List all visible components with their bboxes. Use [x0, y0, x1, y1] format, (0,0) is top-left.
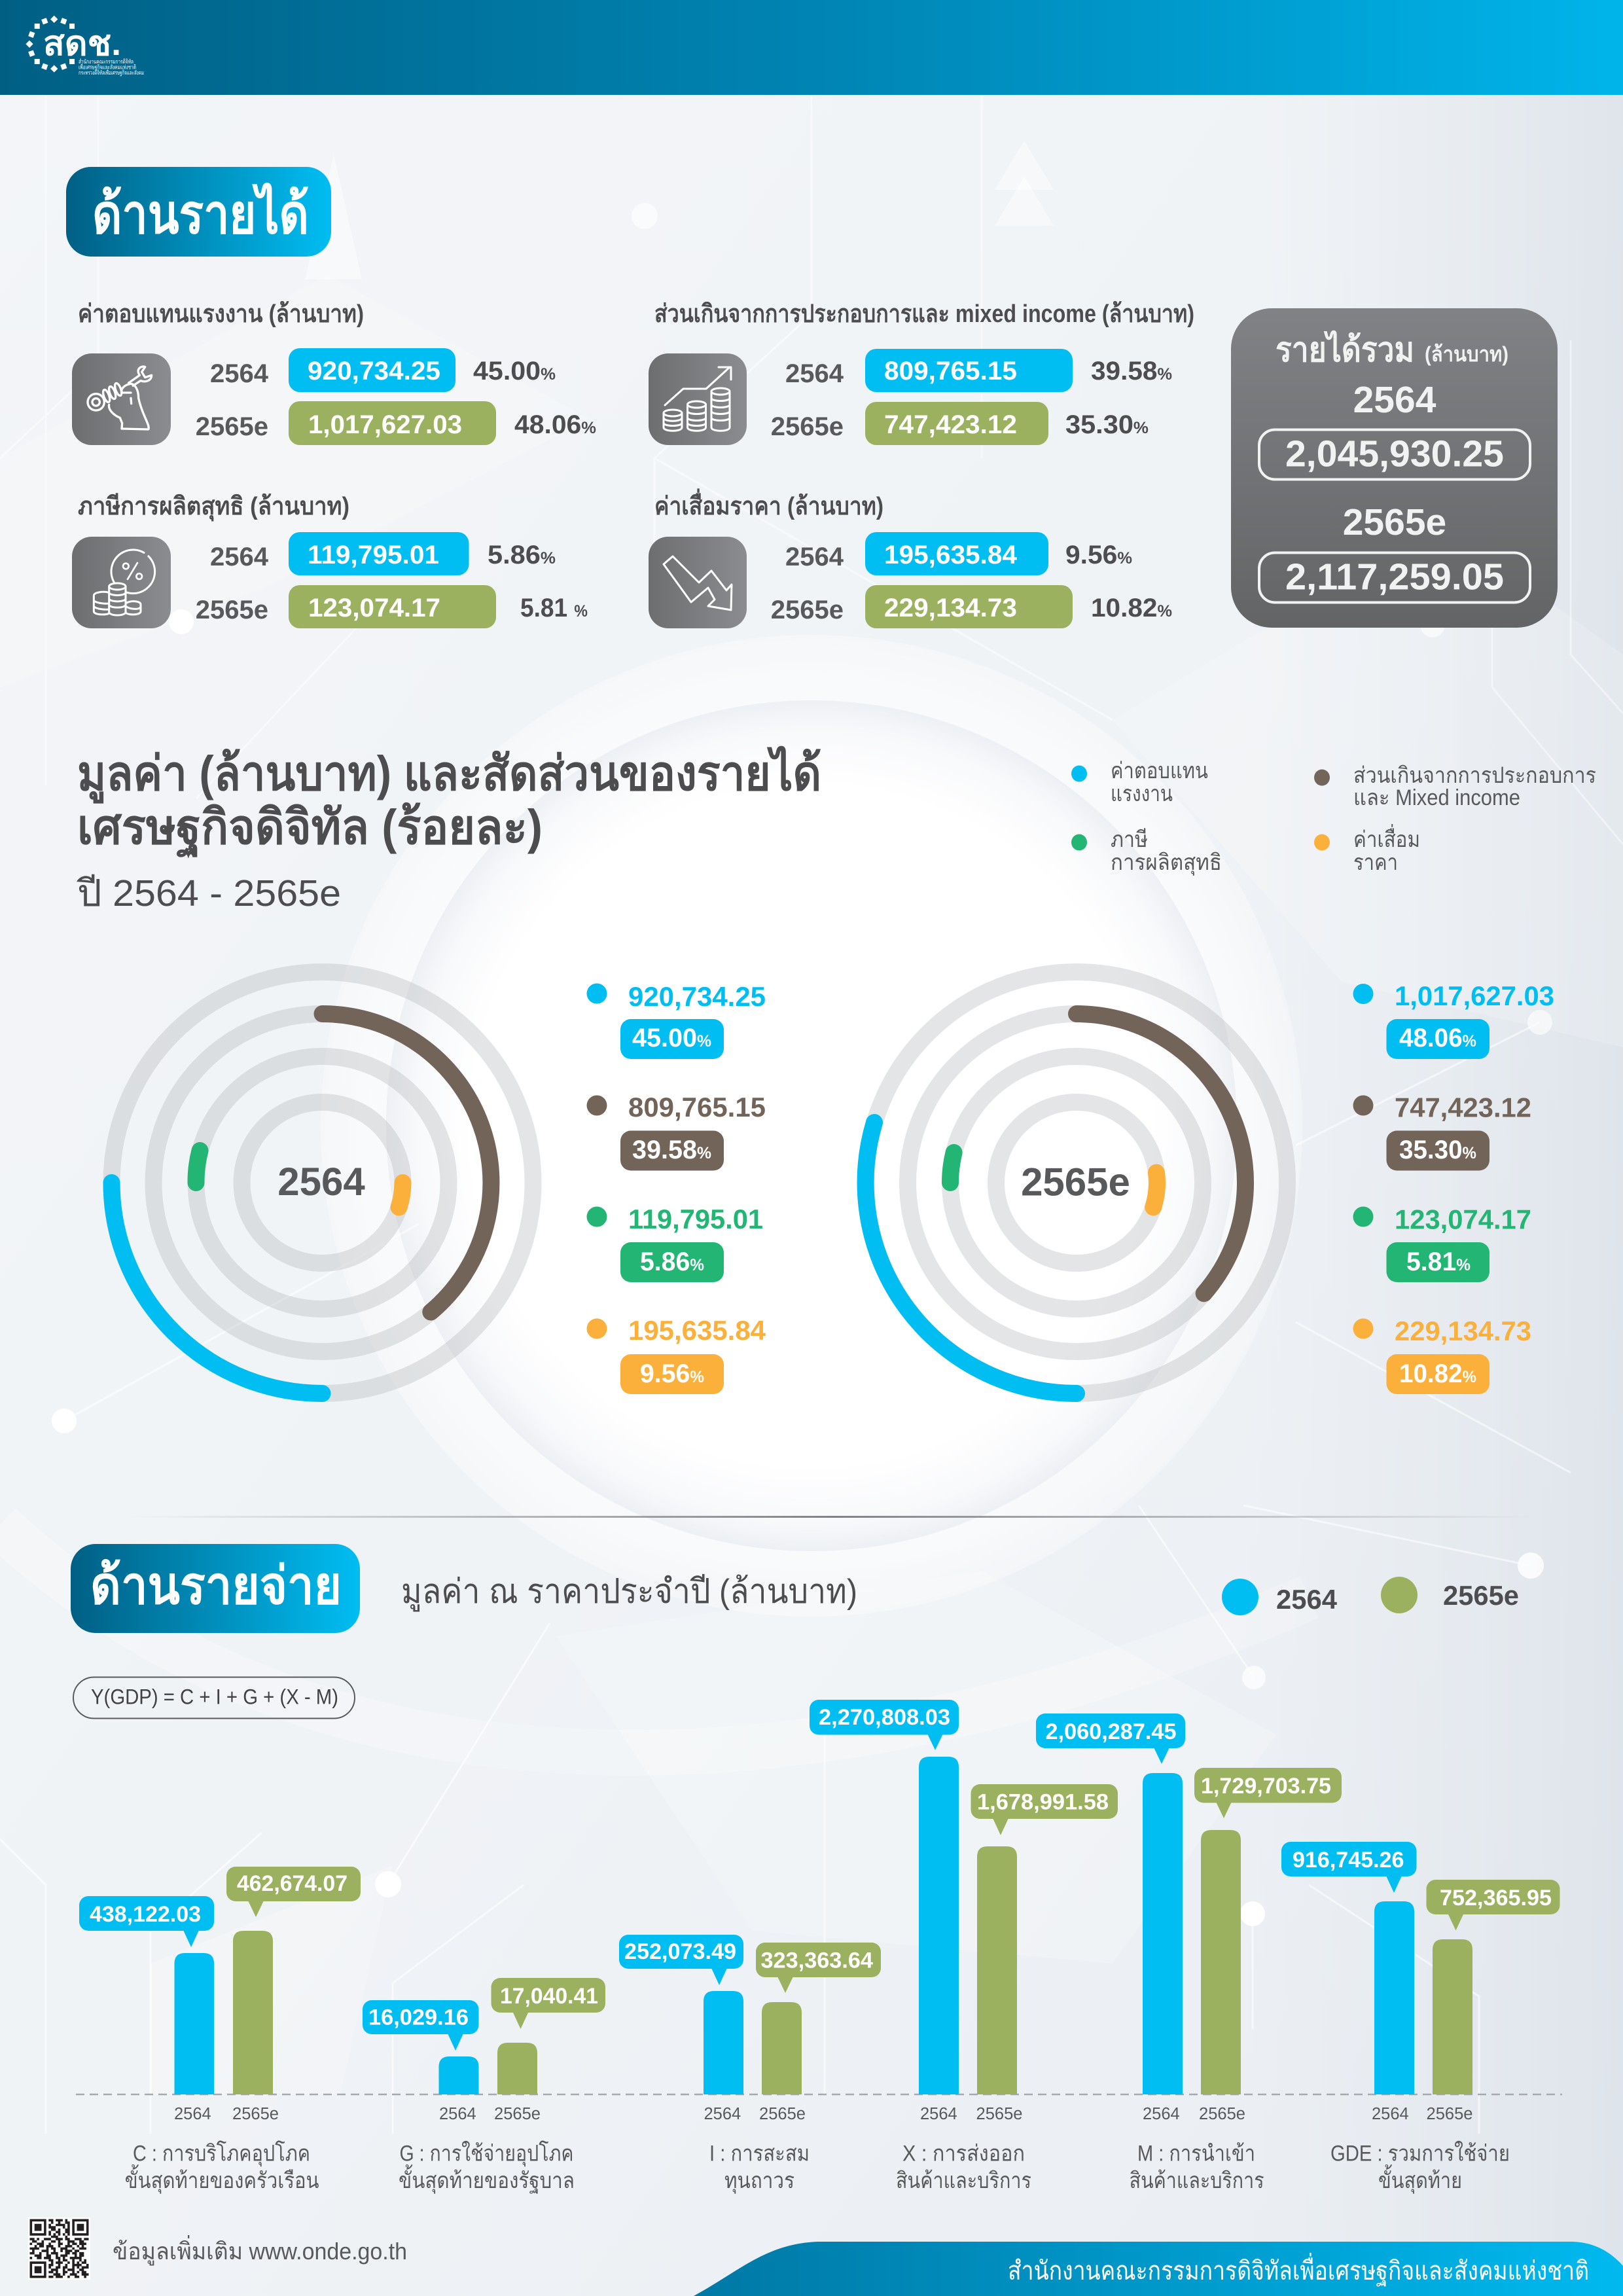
- top header band: [0, 0, 1623, 95]
- row 2564: [785, 532, 1132, 575]
- group: I: 2565e: [759, 2105, 806, 2123]
- QR code: [28, 2217, 90, 2280]
- heading: ค่าตอบแทนแรงงาน (ล้านบาท): [78, 300, 364, 328]
- row 2564: 809,765.15: [884, 357, 1017, 386]
- row 2565e: [196, 585, 588, 628]
- legend: income categories: แรงงาน: [1111, 781, 1173, 806]
- group: GDE: 2565e: [1427, 2105, 1472, 2123]
- row 2565e: 123,074.17: [308, 594, 440, 622]
- value: compensation: 48.06%: [1399, 1024, 1476, 1052]
- row 2565e: 10.82%: [1091, 594, 1172, 622]
- total 2565e: [1259, 501, 1530, 602]
- row 2564: 5.86%: [488, 541, 556, 569]
- panel: total income: [1231, 308, 1558, 628]
- row 2564: 920,734.25: [308, 357, 440, 386]
- legend: income categories: ค่าตอบแทน: [1111, 759, 1208, 783]
- group: C: 2564: [174, 2105, 211, 2123]
- logo: ONDE: กระทรวงดิจิทัลเพื่อเศรษฐกิจและสังคม: [79, 68, 144, 77]
- row 2565e: 1,017,627.03: [308, 410, 462, 439]
- heading pill: expenditure side: ด้านรายจ่าย: [90, 1556, 342, 1615]
- formula pill: [73, 1677, 355, 1719]
- row 2565e: 2565e: [771, 596, 844, 624]
- group: GDE: 916,745.26: [1293, 1848, 1404, 1873]
- row 2564: 2564: [210, 543, 269, 571]
- group: X: 2564: [920, 2105, 957, 2123]
- row 2565e: 48.06%: [514, 410, 596, 439]
- group: C: 2565e: [232, 2105, 279, 2123]
- value: tax: [1353, 1204, 1531, 1282]
- group: C: C : การบริโภคอุปโภค: [133, 2140, 310, 2166]
- group: I: 252,073.49: [624, 1939, 736, 1964]
- group: G: [363, 1978, 605, 2194]
- panel: depreciation: [649, 488, 1172, 628]
- group: G: ขั้นสุดท้ายของรัฐบาล: [399, 2164, 575, 2194]
- group: GDE: 752,365.95: [1440, 1886, 1552, 1910]
- panel: compensation of employees: [72, 300, 596, 445]
- value: tax: 5.81%: [1406, 1247, 1471, 1276]
- chart: radial 2564: 2564: [277, 1160, 365, 1204]
- bar chart: expenditure: [79, 1700, 1560, 2194]
- group: X: [810, 1700, 1118, 2193]
- value: surplus: 39.58%: [632, 1136, 711, 1164]
- icon: falling arrow: [649, 537, 747, 628]
- group: I: 2564: [704, 2105, 741, 2123]
- value: surplus: 35.30%: [1399, 1136, 1476, 1164]
- heading: ภาษีการผลิตสุทธิ (ล้านบาท): [78, 493, 349, 522]
- row 2564: [210, 348, 556, 392]
- logo: ONDE: [26, 16, 144, 77]
- heading: ค่าเสื่อมราคา (ล้านบาท): [654, 488, 883, 520]
- group: GDE: GDE : รวมการใช้จ่าย: [1330, 2140, 1510, 2166]
- icon: growth chart with coins: [649, 353, 747, 445]
- value: compensation: 45.00%: [632, 1024, 711, 1052]
- total heading: รายได้รวม: [1275, 330, 1414, 369]
- chart: radial 2565e: 2565e: [1021, 1160, 1130, 1204]
- value: depreciation: 229,134.73: [1395, 1316, 1531, 1346]
- group: C: [79, 1867, 361, 2194]
- subtitle: มูลค่า ณ ราคาประจำปี (ล้านบาท): [401, 1573, 857, 1612]
- legend: income categories: ส่วนเกินจากการประกอบการ: [1353, 763, 1596, 788]
- panel: operating surplus and mixed income: [649, 300, 1194, 445]
- heading pill: income side: ด้านรายได้: [92, 183, 309, 245]
- row 2564: 2564: [210, 359, 269, 388]
- group: M: [1036, 1713, 1342, 2193]
- group: M: 2564: [1143, 2105, 1180, 2123]
- value: tax: 123,074.17: [1395, 1204, 1531, 1234]
- value: compensation: [586, 981, 766, 1059]
- value: tax: [586, 1204, 763, 1282]
- more info text: ข้อมูลเพิ่มเติม www.onde.go.th: [113, 2235, 407, 2266]
- group: X: X : การส่งออก: [902, 2142, 1025, 2166]
- footer band: [694, 2242, 1623, 2296]
- group: G: G : การใช้จ่ายอุปโภค: [399, 2140, 573, 2166]
- value: depreciation: [586, 1315, 766, 1394]
- group: M: 1,729,703.75: [1201, 1774, 1331, 1799]
- row 2564: 195,635.84: [884, 541, 1018, 569]
- group: G: 2565e: [494, 2105, 541, 2123]
- row 2565e: 2565e: [771, 412, 844, 441]
- row 2565e: [196, 401, 596, 445]
- group: X: 2565e: [976, 2105, 1022, 2123]
- group: GDE: ขั้นสุดท้าย: [1378, 2164, 1462, 2194]
- value: compensation: 1,017,627.03: [1395, 980, 1554, 1011]
- group: X: สินค้าและบริการ: [896, 2168, 1031, 2193]
- group: X: 2,270,808.03: [819, 1705, 950, 1730]
- legend: income categories: ค่าเสื่อม: [1353, 824, 1420, 852]
- chart values 2565e: [1353, 980, 1554, 1394]
- total 2564: 2,045,930.25: [1285, 433, 1504, 475]
- row 2564: 119,795.01: [308, 541, 439, 569]
- row 2564: 2564: [785, 359, 844, 388]
- row 2565e: 35.30%: [1065, 410, 1149, 439]
- group: I: ทุนถาวร: [724, 2168, 794, 2194]
- icon: hand with wrench: [72, 353, 171, 445]
- total 2565e: 2565e: [1343, 501, 1446, 543]
- group: G: 2564: [439, 2105, 476, 2123]
- formula pill: Y(GDP) = C + I + G + (X - M): [91, 1685, 338, 1708]
- group: G: 17,040.41: [500, 1984, 598, 2009]
- legend: years: 2565e: [1443, 1580, 1519, 1611]
- chart section heading: [77, 745, 821, 914]
- chart: radial 2565e: [866, 972, 1287, 1393]
- total 2565e: 2,117,259.05: [1285, 556, 1504, 598]
- row 2564: 45.00%: [473, 357, 556, 386]
- chart section heading: มูลค่า (ล้านบาท) และสัดส่วนของรายได้: [77, 745, 821, 804]
- total 2564: 2564: [1353, 379, 1436, 421]
- group: I: [619, 1935, 881, 2194]
- row 2565e: [771, 585, 1172, 628]
- row 2565e: 747,423.12: [884, 410, 1017, 439]
- value: surplus: 809,765.15: [628, 1092, 766, 1122]
- legend: years: [1222, 1577, 1519, 1615]
- heading pill: expenditure side: [71, 1544, 360, 1633]
- divider: [131, 1516, 1538, 1518]
- total 2564: [1259, 379, 1530, 479]
- value: depreciation: 10.82%: [1399, 1359, 1476, 1388]
- chart values 2564: [586, 981, 766, 1394]
- heading pill: income side: [66, 167, 331, 257]
- logo: ONDE: สำนักงานคณะกรรมการดิจิทัล: [79, 58, 134, 65]
- group: C: 462,674.07: [237, 1871, 348, 1896]
- total unit: (ล้านบาท): [1425, 342, 1508, 366]
- row 2564: 39.58%: [1091, 357, 1172, 386]
- row 2564: [785, 349, 1172, 392]
- value: depreciation: 9.56%: [640, 1359, 704, 1388]
- row 2565e: 5.81 %: [520, 594, 588, 622]
- value: surplus: [1353, 1092, 1531, 1170]
- logo: ONDE: สดช.: [43, 25, 121, 63]
- chart section heading: เศรษฐกิจดิจิทัล (ร้อยละ): [77, 800, 543, 859]
- value: depreciation: [1353, 1316, 1531, 1394]
- group: G: 16,029.16: [368, 2005, 469, 2030]
- panel: tax on production: [72, 493, 588, 628]
- value: tax: 5.86%: [640, 1247, 704, 1276]
- axis baseline: [76, 2094, 1562, 2095]
- row 2564: [210, 532, 556, 575]
- row 2565e: [771, 402, 1149, 445]
- group: M: M : การนำเข้า: [1137, 2142, 1255, 2166]
- group: X: 1,678,991.58: [977, 1789, 1109, 1814]
- row 2564: 2564: [785, 543, 844, 571]
- row 2564: 9.56%: [1065, 541, 1132, 569]
- row 2565e: 2565e: [196, 412, 268, 441]
- legend: income categories: ราคา: [1353, 850, 1398, 875]
- legend: income categories: การผลิตสุทธิ: [1111, 850, 1222, 876]
- logo: ONDE: เพื่อเศรษฐกิจและสังคมแห่งชาติ: [79, 63, 136, 71]
- legend: years: 2564: [1276, 1584, 1338, 1615]
- group: I: 323,363.64: [760, 1948, 873, 1973]
- group: M: 2,060,287.45: [1046, 1719, 1177, 1744]
- group: M: สินค้าและบริการ: [1130, 2168, 1264, 2193]
- value: tax: 119,795.01: [628, 1204, 763, 1234]
- heading: ส่วนเกินจากการประกอบการและ mixed income (ล้านบาท): [654, 300, 1194, 328]
- chart: radial 2564: [111, 972, 533, 1393]
- value: compensation: [1353, 980, 1554, 1059]
- value: compensation: 920,734.25: [628, 981, 766, 1012]
- group: C: 438,122.03: [90, 1902, 201, 1927]
- group: I: I : การสะสม: [709, 2142, 810, 2166]
- legend: income categories: ภาษี: [1111, 827, 1148, 852]
- row 2565e: 2565e: [196, 596, 268, 624]
- value: surplus: 747,423.12: [1395, 1092, 1531, 1123]
- group: GDE: 2564: [1372, 2105, 1409, 2123]
- icon: percent and coins: [72, 537, 171, 628]
- row 2565e: 229,134.73: [884, 594, 1017, 622]
- group: M: 2565e: [1199, 2105, 1245, 2123]
- chart section heading: ปี 2564 - 2565e: [77, 872, 341, 914]
- group: C: ขั้นสุดท้ายของครัวเรือน: [125, 2164, 319, 2194]
- group: GDE: [1281, 1842, 1560, 2194]
- legend: income categories: [1071, 759, 1596, 876]
- legend: income categories: และ Mixed income: [1353, 785, 1520, 810]
- value: depreciation: 195,635.84: [628, 1315, 766, 1346]
- value: surplus: [586, 1092, 766, 1170]
